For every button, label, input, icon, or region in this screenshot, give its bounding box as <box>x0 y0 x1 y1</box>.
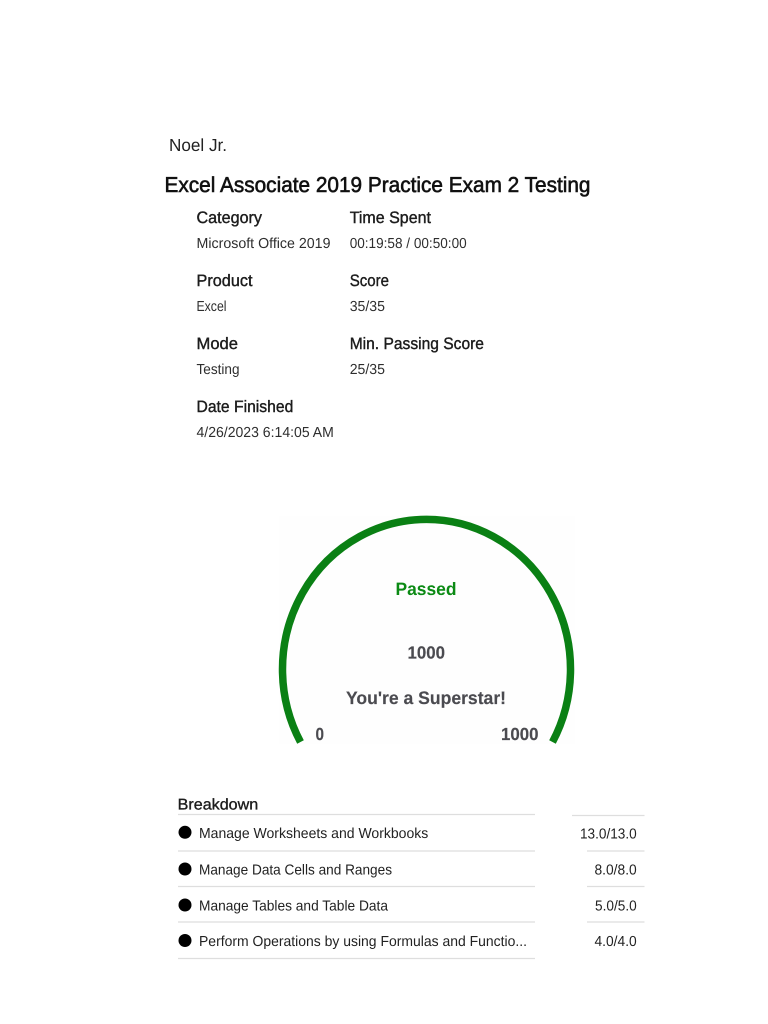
field: score: 35/35 <box>350 299 385 315</box>
field: min passing score: Min. Passing Score <box>350 335 484 353</box>
scale maximum: 1000 <box>501 724 539 744</box>
field: category: Microsoft Office 2019 <box>196 236 330 252</box>
breakdown heading: Breakdown <box>178 796 258 813</box>
message: You're a Superstar! <box>346 688 506 708</box>
field: score <box>350 272 389 315</box>
field: mode: Testing <box>196 362 240 378</box>
score gauge <box>279 516 575 744</box>
field: time spent: Time Spent <box>350 209 431 227</box>
scale minimum: 0 <box>316 724 324 744</box>
row: tables and table data: 5.0/5.0 <box>595 898 637 914</box>
row: data cells and ranges: 8.0/8.0 <box>594 862 637 878</box>
candidate name: Noel Jr. <box>169 135 227 155</box>
field: mode <box>196 335 240 378</box>
status: passed: Passed <box>396 579 456 599</box>
field: product <box>196 272 253 315</box>
breakdown table <box>178 796 644 958</box>
row: worksheets and workbooks: 13.0/13.0 <box>580 826 637 842</box>
field: date finished: Date Finished <box>196 398 293 416</box>
score value: 1000 <box>408 642 445 662</box>
row: formulas and functions: 4.0/4.0 <box>594 934 637 950</box>
field: mode: Mode <box>196 335 238 353</box>
title: Excel Associate 2019 Practice Exam 2 Testing <box>164 173 590 197</box>
exam details panel <box>196 209 484 441</box>
field: date finished <box>196 398 334 441</box>
row: worksheets and workbooks: Manage Worksheets and Workbooks <box>199 826 428 842</box>
row: data cells and ranges: Manage Data Cells and Ranges <box>199 862 392 878</box>
row: worksheets and workbooks <box>178 826 637 842</box>
gauge arc <box>283 519 570 742</box>
field: product: Product <box>196 272 253 290</box>
row: formulas and functions: Perform Operations by using Formulas and Functio... <box>199 934 527 950</box>
row: tables and table data: Manage Tables and Table Data <box>199 898 389 914</box>
field: category <box>196 209 330 252</box>
field: min passing score: 25/35 <box>350 362 385 378</box>
row: tables and table data <box>178 898 637 914</box>
field: category: Category <box>196 209 263 227</box>
field: min passing score <box>350 335 484 378</box>
field: product: Excel <box>196 299 226 315</box>
field: time spent <box>350 209 467 252</box>
field: time spent: 00:19:58 / 00:50:00 <box>350 236 467 252</box>
field: score: Score <box>350 272 389 290</box>
field: date finished: 4/26/2023 6:14:05 AM <box>196 425 334 441</box>
row: data cells and ranges <box>178 862 637 878</box>
